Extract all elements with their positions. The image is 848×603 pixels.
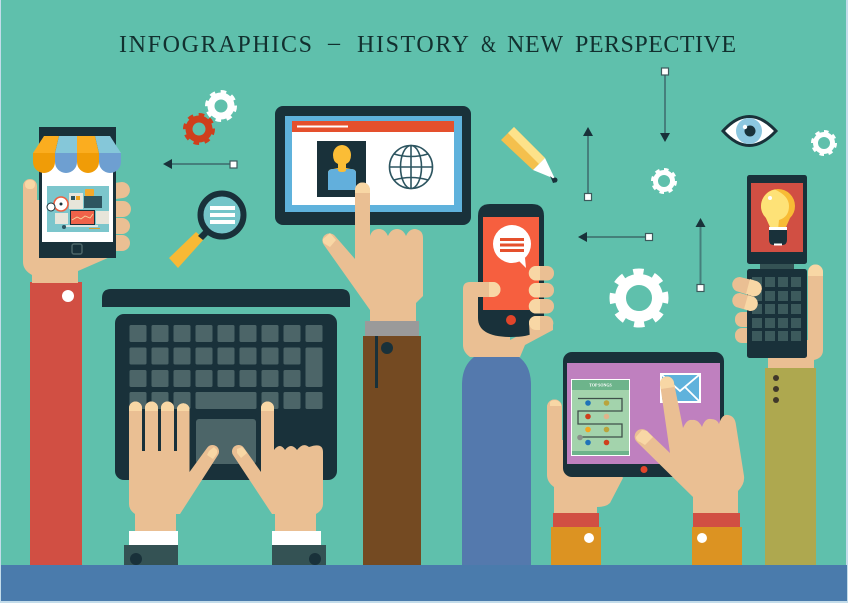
tablet body [563, 352, 724, 477]
left typing hand [124, 402, 219, 565]
monitor tablet [275, 106, 471, 225]
palm [463, 270, 553, 357]
gear: small centre [652, 170, 676, 192]
arrow: left [578, 232, 652, 242]
palm and thumb [768, 265, 823, 368]
gear: red [185, 115, 213, 143]
keys [130, 325, 322, 409]
arrow: up right [696, 218, 706, 292]
phone body [39, 127, 116, 258]
laptop lid [102, 289, 350, 307]
eye [723, 116, 776, 146]
light bulb [761, 189, 795, 246]
arrow: up left [583, 127, 593, 200]
fingers on keypad [732, 277, 762, 311]
infographic inset: TOP SONGS [589, 382, 613, 388]
left thumb [547, 400, 562, 450]
phone [478, 204, 544, 337]
touchpad [196, 419, 256, 464]
left cuff [551, 513, 601, 565]
title: & [481, 32, 496, 58]
portrait [317, 141, 366, 197]
pointing hand with brown sleeve [322, 182, 423, 565]
keypad [752, 277, 801, 341]
title: HISTORY [357, 32, 469, 58]
flip phone hand with olive sleeve [732, 175, 823, 565]
gear: small right [812, 132, 836, 154]
right cuff [692, 513, 742, 565]
keyboard laptop [102, 289, 350, 480]
left sleeve [30, 282, 82, 565]
right typing hand [232, 402, 326, 565]
hand and store phone [23, 127, 131, 283]
hand holding phone [23, 179, 131, 283]
right hand [635, 376, 744, 513]
left hand [547, 400, 623, 513]
tablet with two hands [547, 352, 744, 565]
thumb over phone [478, 282, 501, 297]
arrow: left from store phone [163, 159, 237, 169]
dashboard illustration [47, 186, 109, 232]
gear: white top [207, 92, 235, 120]
infographic inset [571, 379, 630, 456]
fingers [529, 266, 554, 341]
title: – [327, 30, 341, 56]
arrow: down [660, 68, 670, 142]
globe [390, 146, 432, 188]
title [119, 30, 736, 58]
title: INFOGRAPHICS [119, 32, 312, 58]
olive sleeve [765, 368, 816, 565]
magnifier [169, 194, 244, 268]
envelope [660, 373, 701, 403]
chat bubble [493, 225, 531, 268]
title: NEW [507, 32, 563, 58]
blue sleeve [462, 357, 531, 565]
pencil [501, 127, 558, 183]
gear: large [612, 272, 666, 324]
blue sleeve phone hand [462, 204, 554, 565]
laptop base [115, 314, 337, 480]
awning [33, 136, 121, 173]
bottom band [1, 565, 847, 601]
title: PERSPECTIVE [575, 32, 736, 58]
flip phone [747, 175, 807, 264]
